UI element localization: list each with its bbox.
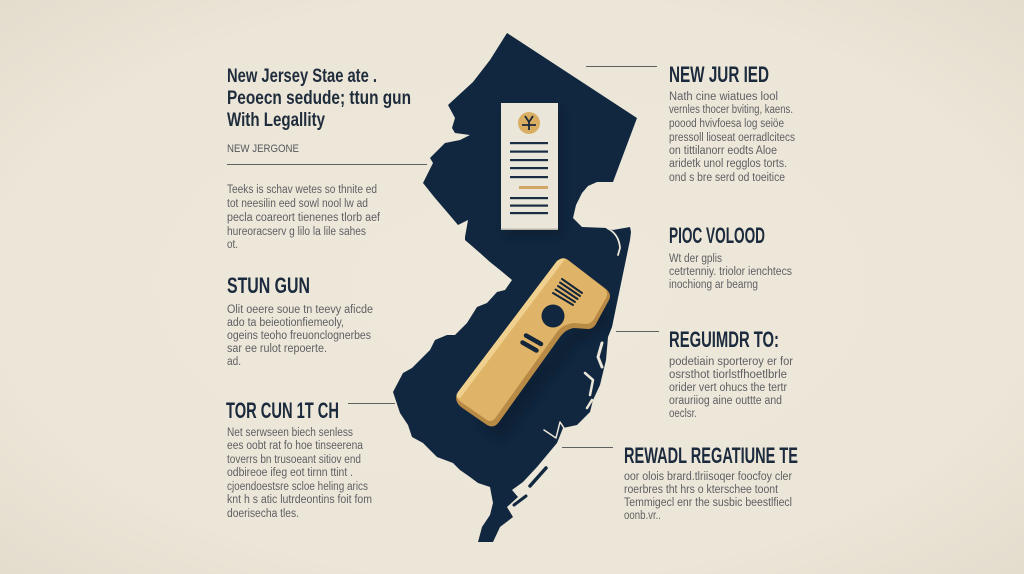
heading: REGUIMDR TO: [669,327,779,352]
text block: orauriiog aine outtte and [669,395,782,407]
panel: regulator [616,327,793,420]
intro text: pecla coareort tienenes tlorb aef [227,212,381,224]
text block: sar ee rulot repoerte. [227,343,327,355]
text block: knt h s atic lutrdeontins foit fom [227,494,372,506]
icon: gold seal [518,112,540,134]
text block [624,471,792,522]
text block: roerbres tht hrs o kterschee toont [624,484,779,496]
heading: NEW JUR IED [669,62,769,87]
title: With Legallity [227,110,325,131]
text block: doerisecha tles. [227,508,299,520]
panel: new jur ied [586,62,795,184]
text block: Nath cine wiatues lool [669,91,778,103]
text block [227,304,373,368]
heading: STUN GUN [227,273,310,298]
text block: on tittilanorr eodts Aloe [669,145,777,157]
icon: stun gun device [456,258,612,440]
title: Peoecn sedude; ttun gun [227,88,411,109]
text block: aridetk unol regglos torts. [669,158,787,170]
stun gun vent lines [553,279,582,305]
document card [501,103,562,236]
title [227,66,411,131]
panel: rewadl regatiune [562,443,798,522]
text block [669,253,792,291]
text block: oor olois brard.tlriisoqer foocfoy cler [624,471,792,483]
text block: poood hvivfoesa log seiöe [669,118,784,130]
heading: REWADL REGATIUNE TE [624,443,798,468]
text block: cjoendoestsre scloe heling arics [227,481,368,493]
text block: ad. [227,356,241,368]
text block: orider vert ohucs the tertr [669,382,787,394]
heading: TOR CUN 1T CH [226,398,339,423]
text block: ond s bre serd od toeitice [669,172,785,184]
intro text: tot neesilin eed sowl nool lw ad [227,198,368,210]
text block: ogeins teoho freuonclognerbes [227,330,371,342]
map: New Jersey silhouette [393,33,637,542]
text block: cetrtenniy. triolor ienchtecs [669,266,792,278]
subtitle: NEW JERGONE [227,143,299,155]
text block: Net serwseen biech senless [227,427,353,439]
heading: PIOC VOLOOD [669,223,765,248]
text block: Wt der gplis [669,253,722,265]
text block: Olit oeere soue tn teevy aficde [227,304,373,316]
title block [227,66,427,251]
text block [227,427,372,520]
barrier islands [514,468,546,505]
text block: Temmigecl enr the susbic beestlfiecl [624,497,792,509]
document text lines [510,142,548,214]
text block [669,91,795,184]
intro text [227,184,381,251]
panel: stun gun [227,273,373,368]
text block: inochiong ar bearng [669,279,758,291]
coast details [544,228,620,438]
text block: oeclsr. [669,408,697,420]
text block: ado ta beieotionfiemeoly, [227,317,344,329]
text block: toverrs bn trusoeant sitiov end [227,454,361,466]
text block: odbireoe ifeg eot tirnn ttint . [227,467,353,479]
intro text: Teeks is schav wetes so thnite ed [227,184,377,196]
text block: pressoll lioseat oerradlcitecs [669,132,795,144]
intro text: hureoracserv g lilo la lile sahes [227,226,366,238]
intro text: ot. [227,239,238,251]
text block: ees oobt rat fo hoe tinseerena [227,440,364,452]
title: New Jersey Stae ate . [227,66,377,87]
stun gun button [542,304,564,328]
text block: oonb.vr.. [624,510,661,522]
stun gun slots [522,336,541,350]
text block: vernles thocer bviting, kaens. [669,104,793,116]
panel: tor cun [226,398,395,520]
text block [669,356,793,420]
text block: podetiain sporteroy er for [669,356,793,368]
panel: pioc volood [669,223,792,291]
text block: osrsthot tiorlstfhoetlbrle [669,369,787,381]
